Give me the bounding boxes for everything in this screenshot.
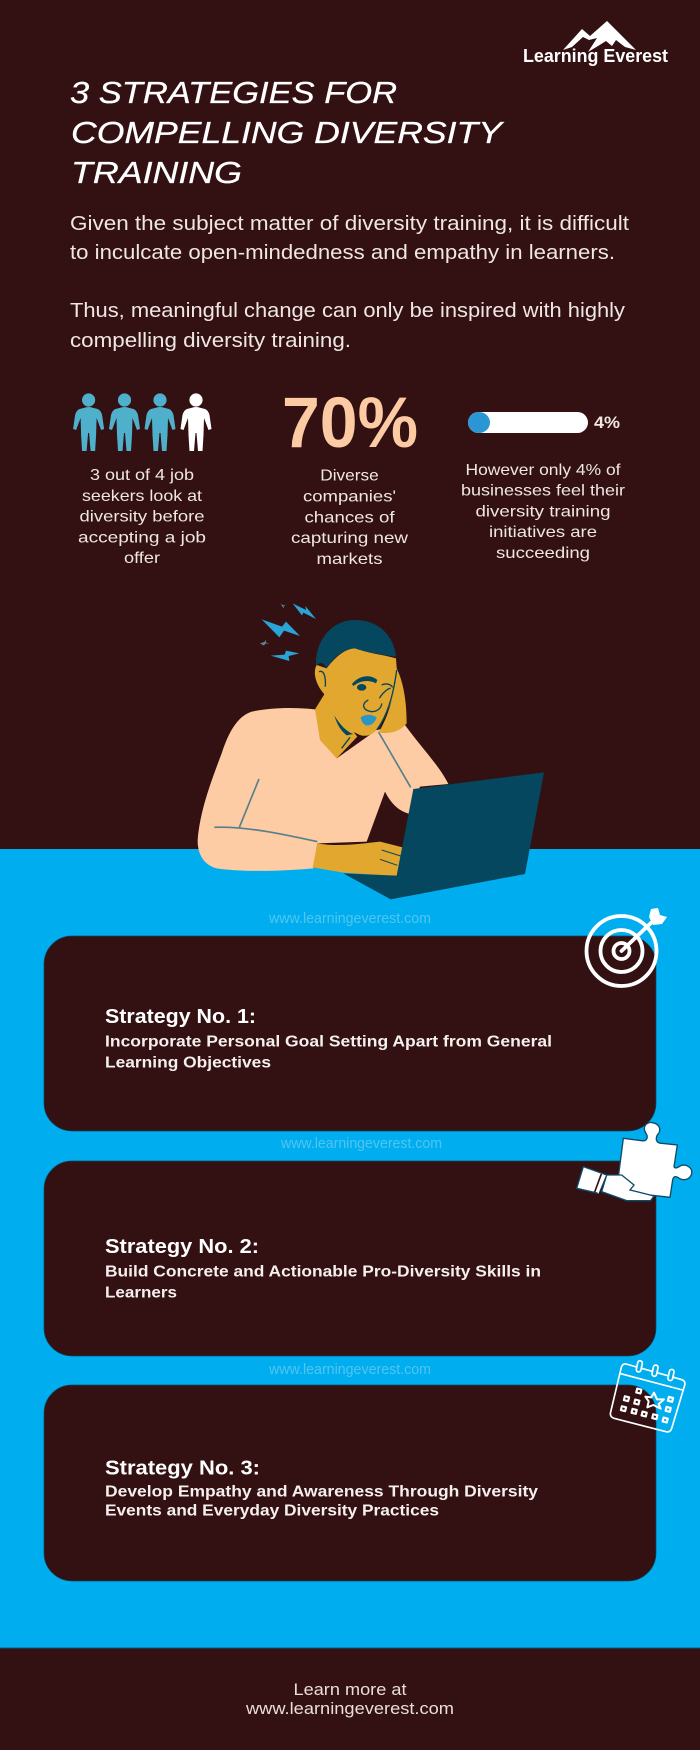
text: strategy 2 description: Learners (105, 1285, 177, 1302)
eye (357, 684, 366, 691)
stat 2: 70% figure: 70% (282, 384, 418, 463)
watermark 1: www.learningeverest.com (268, 910, 431, 927)
intro text: Given the subject matter of diversity training, it is difficult (70, 212, 629, 235)
stat 2 text (291, 468, 409, 568)
stat 2 text: capturing new (291, 530, 409, 547)
text: strategy 2 description: Build Concrete and Actionable Pro-Diversity Skills in (105, 1264, 541, 1281)
title: COMPELLING DIVERSITY (71, 115, 505, 150)
icon: target with arrow (586, 908, 667, 986)
stat 3 text (461, 462, 626, 562)
heading: strategy 2: Strategy No. 2: (105, 1236, 259, 1258)
background: dark footer (0, 1648, 700, 1750)
title: 3 STRATEGIES FOR (70, 75, 397, 110)
stat 1 text: offer (124, 550, 161, 567)
title (70, 75, 505, 190)
icon: calendar with star (610, 1360, 685, 1432)
stat 3: progress bar (468, 412, 620, 433)
face (324, 648, 397, 736)
stat 1 text: accepting a job (78, 530, 206, 547)
finger lines (380, 850, 401, 865)
hair (316, 620, 396, 668)
watermark 3: www.learningeverest.com (268, 1361, 431, 1378)
stat 1 text: 3 out of 4 job (90, 467, 194, 484)
stat 2 text: markets (316, 551, 382, 568)
sweater fold lines (214, 732, 411, 842)
facial details (319, 670, 397, 748)
laptop (343, 772, 544, 899)
panel: strategy 2 (44, 1161, 656, 1356)
stat 3 text: However only 4% of (466, 462, 621, 479)
text: strategy 3 description (105, 1484, 538, 1520)
panel: strategy 1 (44, 936, 656, 1131)
text: strategy 3 description: Events and Everyday Diversity Practices (105, 1503, 439, 1520)
stat 2 text: companies' (303, 489, 396, 506)
stat 3 text: businesses feel their (461, 483, 626, 500)
background: dark top (0, 0, 700, 849)
heading: strategy 3: Strategy No. 3: (105, 1458, 260, 1480)
man body in peach sweater (198, 708, 448, 871)
stat 3: progress bar: 4% (594, 414, 620, 432)
logo: Learning Everest: Learning Everest (523, 45, 668, 66)
intro text: Thus, meaningful change can only be inspired with highly (70, 299, 626, 322)
logo: Learning Everest (523, 21, 668, 66)
text: strategy 1 description: Learning Objectives (105, 1055, 271, 1072)
stat 1 text: seekers look at (82, 488, 203, 505)
eyebrow (352, 676, 377, 686)
text: strategy 3 description: Develop Empathy and Awareness Through Diversity (105, 1484, 538, 1501)
stat 2 text: Diverse (320, 468, 379, 485)
stat 3 text: initiatives are (489, 524, 597, 541)
heading: strategy 1: Strategy No. 1: (105, 1006, 256, 1028)
footer text: Learn more at (294, 1680, 407, 1699)
text: strategy 1 description (105, 1034, 552, 1072)
title: TRAINING (71, 155, 242, 190)
neck (315, 692, 357, 758)
text: strategy 1 description: Incorporate Personal Goal Setting Apart from General (105, 1034, 552, 1051)
stat 1 text (78, 467, 206, 567)
stat 1: people icons (73, 393, 211, 451)
intro text: to inculcate open-mindedness and empathy in learners. (70, 241, 615, 264)
footer text: www.learningeverest.com (245, 1699, 454, 1718)
intro text (70, 212, 629, 352)
lower hand (313, 842, 403, 876)
panel: strategy 3 (44, 1385, 656, 1581)
footer text (245, 1680, 454, 1718)
hand on cheek (378, 668, 407, 733)
illustration: stressed man at laptop (198, 603, 544, 899)
text: strategy 2 description (105, 1264, 541, 1302)
icon: hand holding puzzle piece (577, 1123, 692, 1201)
ear (315, 665, 332, 696)
stat 3 text: succeeding (496, 545, 590, 562)
icon: lightning bolts (260, 603, 316, 661)
stat 1 text: diversity before (80, 509, 205, 526)
stat 2 text: chances of (304, 510, 395, 527)
intro text: compelling diversity training. (70, 329, 351, 352)
watermark 2: www.learningeverest.com (280, 1135, 442, 1152)
background: blue section (0, 849, 700, 1648)
stat 3 text: diversity training (476, 504, 610, 521)
